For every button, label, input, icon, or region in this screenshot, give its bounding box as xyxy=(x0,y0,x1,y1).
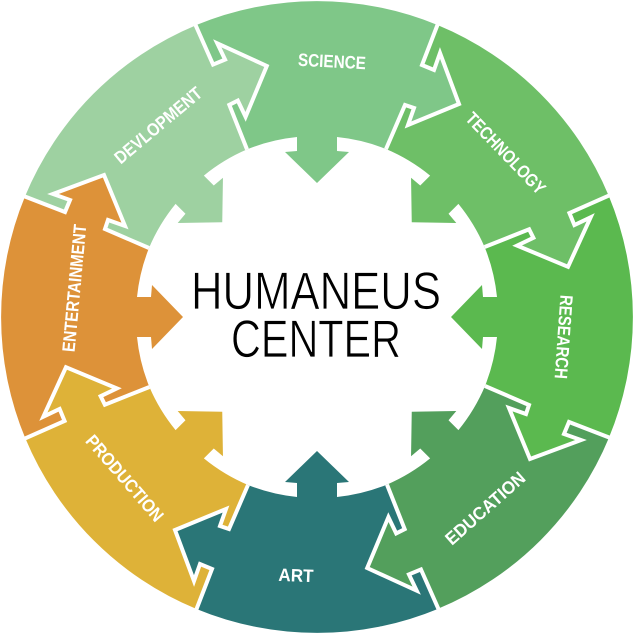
puzzle piece: Science xyxy=(196,1,459,183)
puzzle piece: Education xyxy=(311,326,626,634)
segment: Science xyxy=(196,1,459,183)
puzzle piece: Entertainment xyxy=(1,175,183,438)
puzzle piece: Development xyxy=(8,0,323,308)
title: Humaneus Center: CENTER xyxy=(231,310,401,369)
segment: Art xyxy=(175,451,438,633)
title: Humaneus Center: HUMANEUS xyxy=(191,262,441,321)
label: Science: SCIENCE xyxy=(297,50,366,73)
label: Technology: TECHNOLOGY xyxy=(462,108,550,198)
segment: Technology xyxy=(326,8,634,323)
puzzle piece: Production xyxy=(0,311,308,626)
segment: Production xyxy=(0,311,308,626)
puzzle piece: Art xyxy=(175,451,438,633)
label: Production: PRODUCTION xyxy=(82,431,168,526)
label: Research: RESEARCH xyxy=(551,294,576,380)
segment: Research xyxy=(451,196,633,459)
segment: Entertainment xyxy=(1,175,183,438)
label: Entertainment: ENTERTAINMENT xyxy=(59,223,90,353)
label: Art: ART xyxy=(278,565,314,586)
label: Development: DEVLOPMENT xyxy=(111,83,206,168)
puzzle piece: Technology xyxy=(326,8,634,323)
segment: Education xyxy=(311,326,626,634)
label: Education: EDUCATION xyxy=(441,468,529,549)
segment: Development xyxy=(8,0,323,308)
title: Humaneus Center xyxy=(191,262,441,369)
puzzle piece: Research xyxy=(451,196,633,459)
